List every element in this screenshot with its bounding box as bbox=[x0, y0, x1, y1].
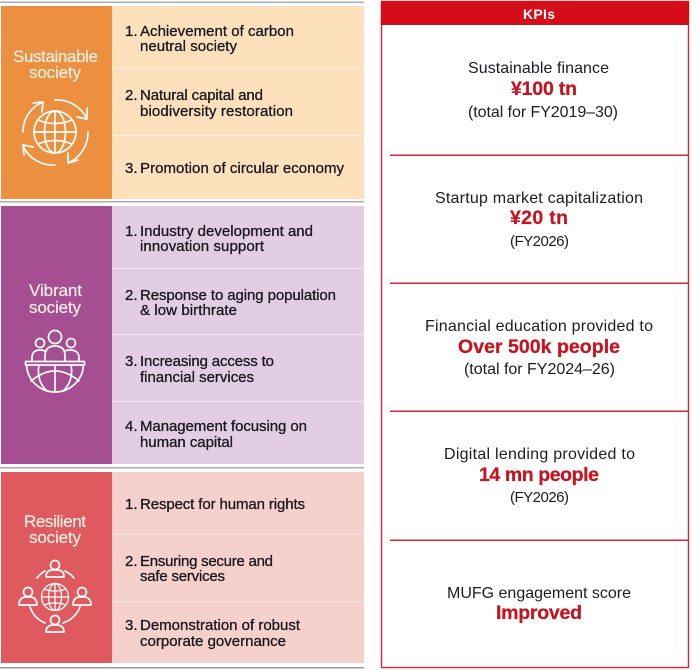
list: Vibrant society items: Increasing access to bbox=[140, 353, 274, 370]
list: Sustainable society items: biodiversity restoration bbox=[140, 103, 293, 120]
list: Vibrant society items: 4. bbox=[125, 418, 138, 435]
KPI: sustainable finance: ¥100 tn bbox=[511, 78, 577, 100]
heading: Sustainable society: Sustainable bbox=[13, 47, 98, 66]
icon: globe with circular arrows bbox=[23, 100, 88, 165]
list: Sustainable society items: 1. bbox=[125, 23, 138, 40]
list: Resilient society items: 3. bbox=[125, 617, 138, 634]
icon: people over globe bbox=[26, 330, 84, 392]
panel: Resilient society bbox=[1, 472, 364, 663]
list: Vibrant society items: human capital bbox=[140, 434, 233, 451]
panel: KPIs bbox=[381, 1, 689, 668]
list: Resilient society items: safe services bbox=[140, 568, 225, 585]
list: Sustainable society items bbox=[125, 23, 344, 177]
header: KPIs bbox=[381, 1, 689, 25]
heading: Sustainable society: society bbox=[29, 63, 82, 82]
list: Resilient society items: Demonstration of robust bbox=[140, 617, 301, 634]
list: Vibrant society items bbox=[125, 223, 336, 451]
KPI: startup market capitalization: ¥20 tn bbox=[510, 207, 568, 229]
KPI: engagement score: MUFG engagement score bbox=[447, 585, 631, 602]
list: Resilient society items: 1. bbox=[125, 496, 138, 513]
list: Sustainable society items: 3. bbox=[125, 160, 138, 177]
KPI: digital lending: (FY2026) bbox=[510, 489, 569, 506]
list: Vibrant society items: financial services bbox=[140, 369, 254, 386]
list: Resilient society items: Ensuring secure and bbox=[140, 553, 273, 570]
list: Vibrant society items: Management focusing on bbox=[140, 418, 307, 435]
list: Vibrant society items: 2. bbox=[125, 287, 138, 304]
list: Resilient society items: Respect for human rights bbox=[140, 496, 305, 513]
list: Sustainable society items: neutral society bbox=[140, 38, 238, 55]
KPI: startup market capitalization: (FY2026) bbox=[510, 233, 569, 250]
KPI: sustainable finance bbox=[468, 60, 618, 121]
KPI: digital lending: 14 mn people bbox=[479, 464, 599, 486]
list: Sustainable society items: 2. bbox=[125, 87, 138, 104]
list: Resilient society items bbox=[125, 496, 305, 650]
KPI: financial education bbox=[425, 318, 653, 378]
heading: Resilient society: society bbox=[29, 528, 82, 547]
header: KPIs: KPIs bbox=[523, 6, 555, 22]
list: Sustainable society items: Achievement of carbon bbox=[140, 23, 294, 40]
list: Vibrant society items: innovation support bbox=[140, 238, 265, 255]
KPI: sustainable finance: (total for FY2019–30) bbox=[468, 104, 618, 121]
panel: Vibrant society bbox=[1, 206, 364, 464]
KPI: engagement score: Improved bbox=[496, 602, 582, 624]
list: Vibrant society items: 1. bbox=[125, 223, 138, 240]
panel: Sustainable society bbox=[1, 6, 364, 199]
KPI: digital lending: Digital lending provided to bbox=[444, 446, 635, 463]
list: Vibrant society items: 3. bbox=[125, 353, 138, 370]
list: Vibrant society items: Response to aging population bbox=[140, 287, 336, 304]
list: Sustainable society items: Promotion of circular economy bbox=[140, 160, 344, 177]
list: Resilient society items: 2. bbox=[125, 553, 138, 570]
list: Resilient society items: corporate governance bbox=[140, 633, 286, 650]
KPI: startup market capitalization: Startup market capitalization bbox=[435, 190, 643, 207]
KPI: sustainable finance: Sustainable finance bbox=[468, 60, 609, 77]
KPI: financial education: Over 500k people bbox=[458, 336, 620, 358]
list: Vibrant society items: Industry development and bbox=[140, 223, 313, 240]
KPI: financial education: (total for FY2024–26) bbox=[464, 361, 615, 378]
icon: people circle around globe bbox=[19, 560, 91, 632]
list: Vibrant society items: & low birthrate bbox=[140, 302, 237, 319]
KPI: startup market capitalization bbox=[435, 190, 643, 250]
KPI: digital lending bbox=[444, 446, 635, 506]
KPI: engagement score bbox=[447, 585, 631, 624]
heading: Resilient society: Resilient bbox=[24, 512, 86, 531]
heading: Vibrant society: society bbox=[29, 298, 82, 317]
KPI: financial education: Financial education provided to bbox=[425, 318, 653, 335]
heading: Vibrant society: Vibrant bbox=[29, 281, 82, 300]
list: Sustainable society items: Natural capital and bbox=[140, 87, 263, 104]
